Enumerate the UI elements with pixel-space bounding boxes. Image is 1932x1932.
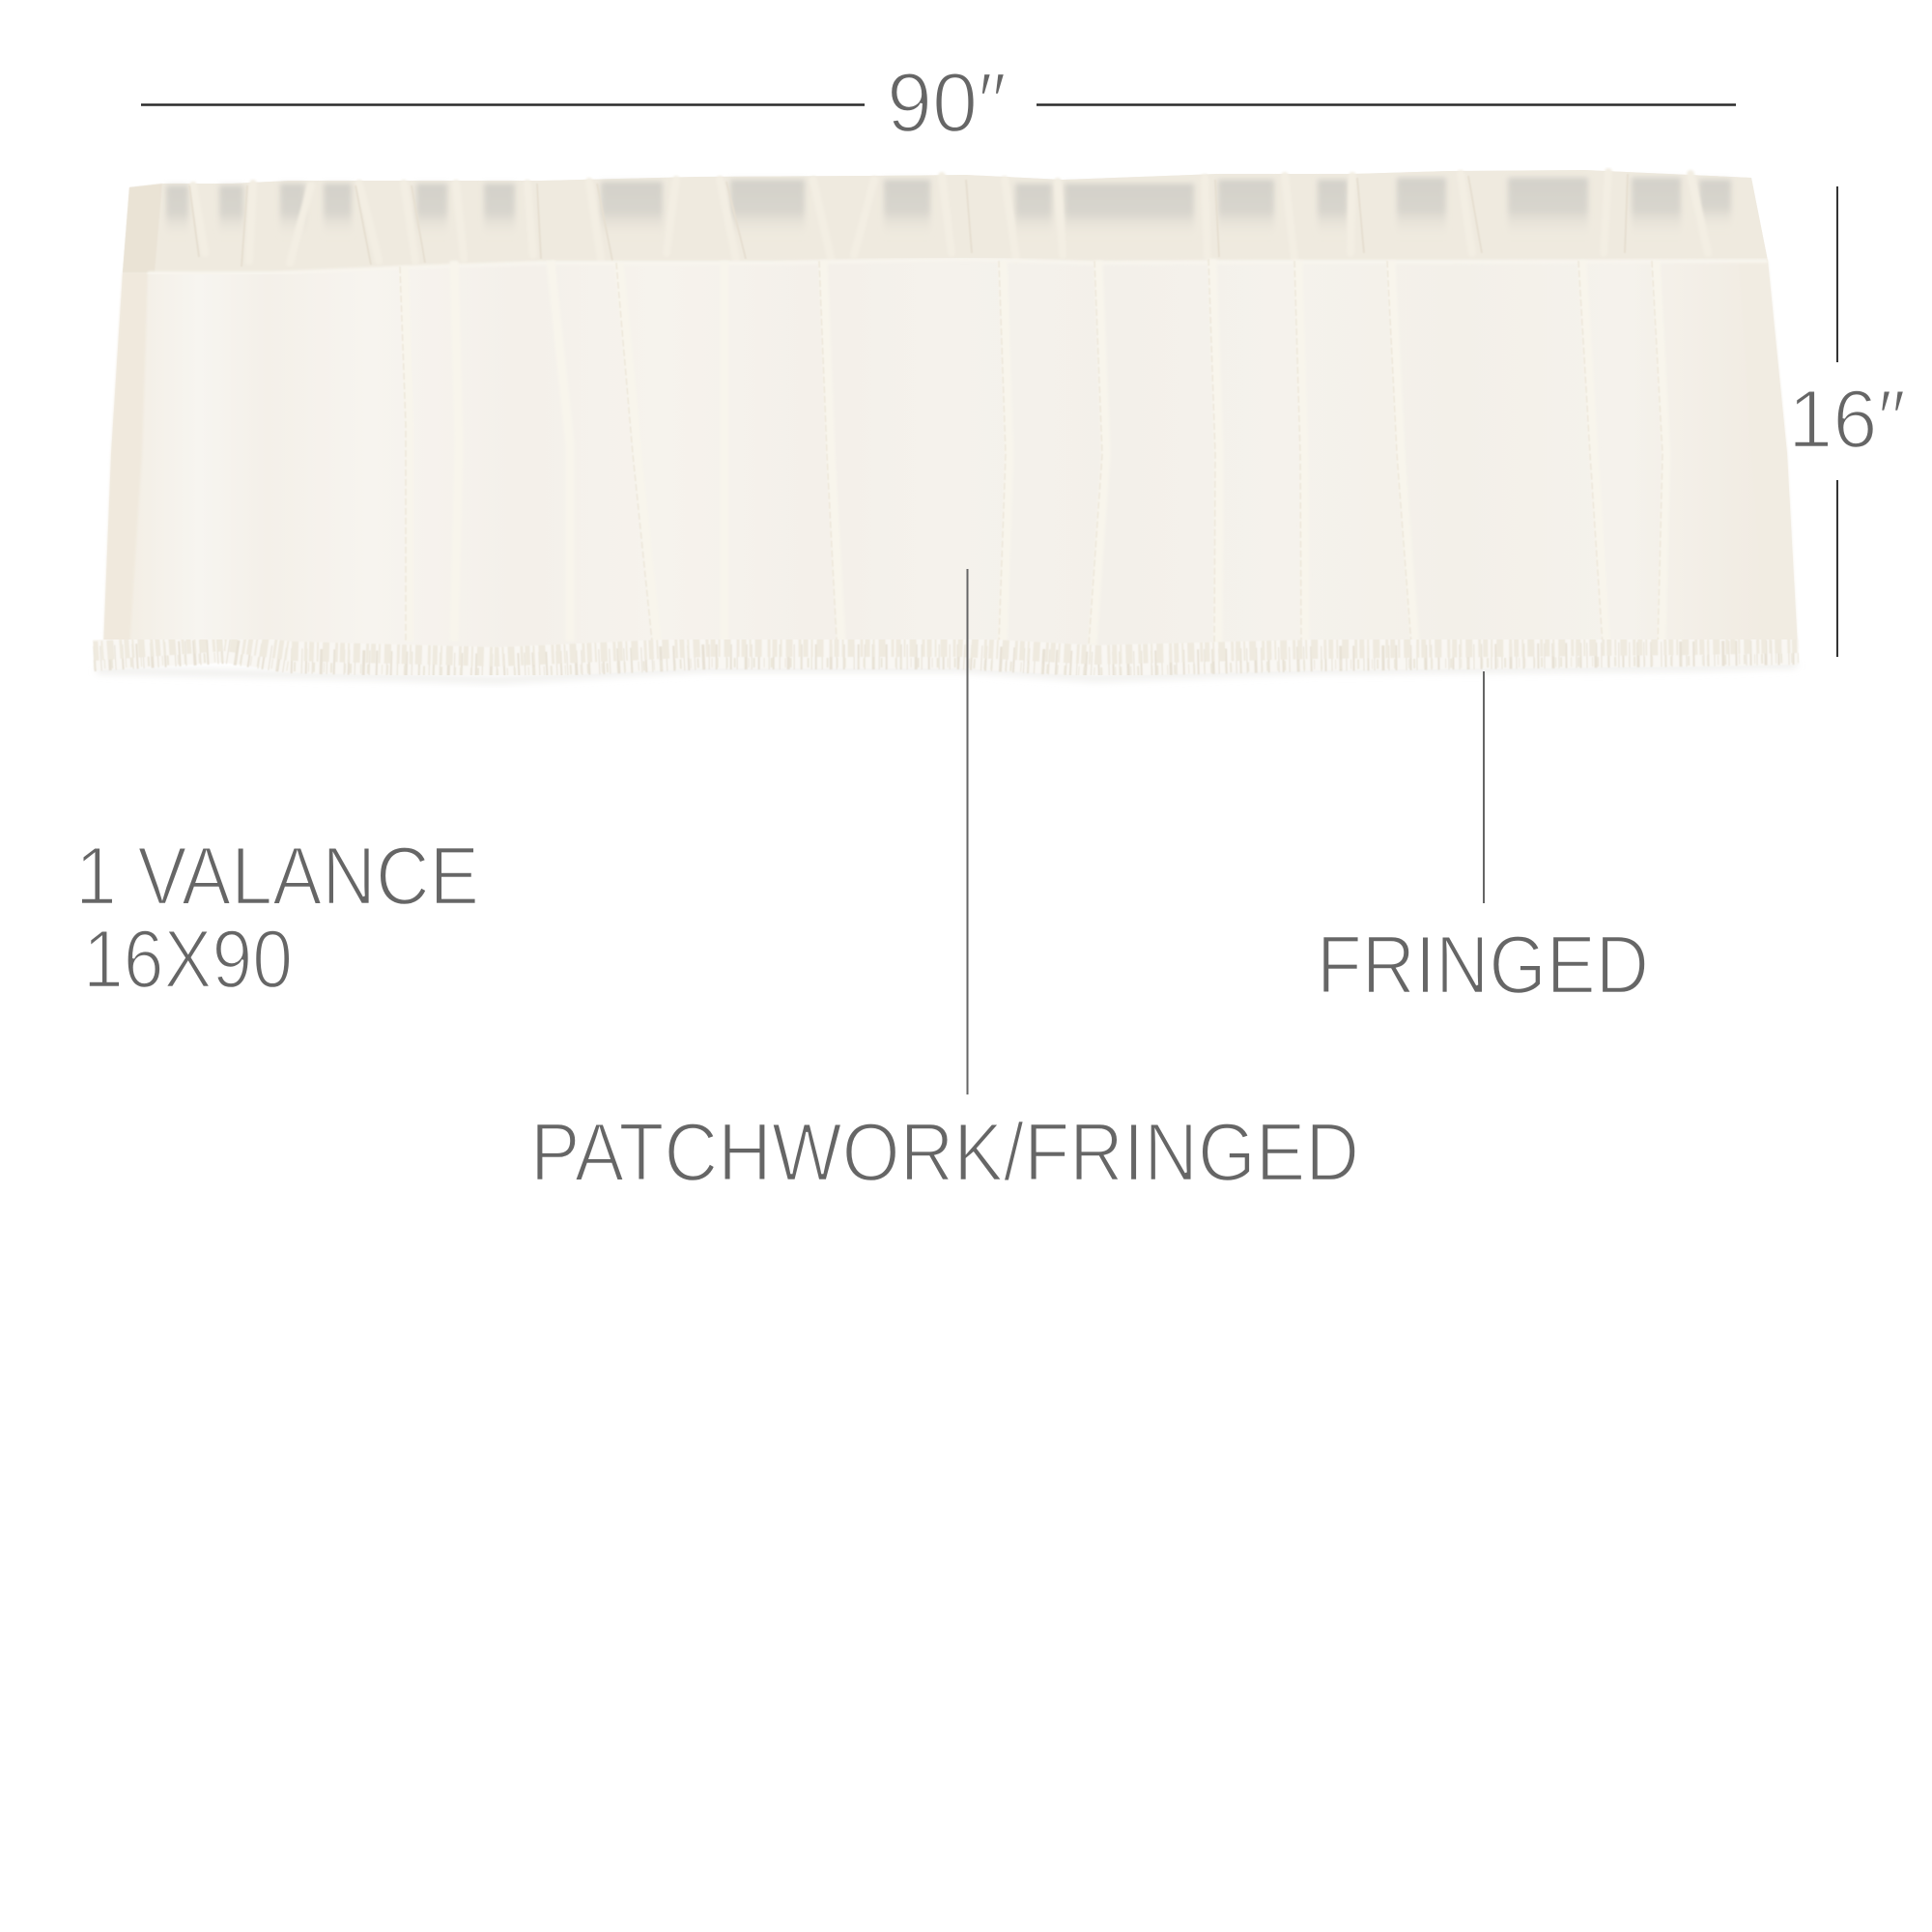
leader line [966, 569, 968, 1094]
patchwork fringed stripes [404, 259, 1666, 645]
left hem [103, 272, 148, 647]
bottom fringe [94, 641, 1799, 673]
product count and size label [75, 831, 479, 1006]
callout text: PATCHWORK/FRINGED [530, 1107, 1359, 1199]
right hem [1739, 261, 1798, 649]
curtain body [103, 170, 1798, 653]
top rod pocket band [123, 170, 1768, 273]
left band tab [123, 184, 162, 272]
sheer grey gathers along the rod pocket [166, 178, 1731, 237]
1 valance text: 1 VALANCE [75, 831, 479, 923]
soft floor shadow [97, 665, 1797, 680]
callout text: FRINGED [1317, 920, 1649, 1011]
leader line [1483, 671, 1485, 903]
width rule left [141, 103, 865, 106]
width label: 90″ [887, 56, 1007, 150]
curtain valance [94, 170, 1799, 680]
size text: 16X90 [83, 914, 293, 1006]
height label: 16″ [1788, 374, 1906, 466]
height rule upper [1836, 186, 1838, 362]
width rule right [1037, 103, 1736, 106]
band seam [148, 259, 1768, 273]
gather pleats [193, 172, 1708, 263]
height rule lower [1836, 480, 1838, 657]
